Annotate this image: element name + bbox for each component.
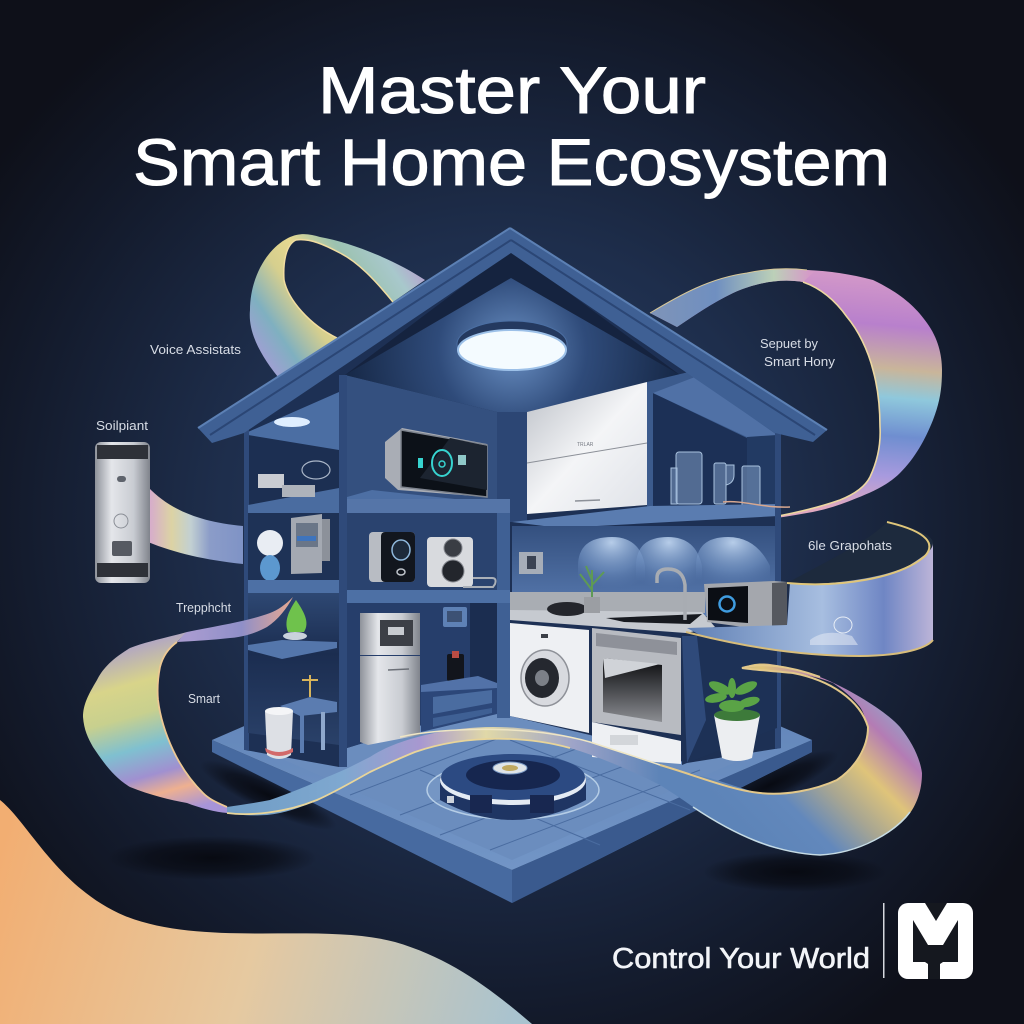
white cup: [265, 707, 293, 759]
house: [198, 228, 827, 903]
tagline: Control Your World: [612, 943, 870, 975]
washing machine: [510, 623, 589, 733]
ribbon: left device band: [148, 487, 243, 564]
slab shadow right: [695, 739, 845, 831]
small devices on shelf: [258, 461, 330, 497]
left first shelf: [248, 488, 339, 513]
potted plant: [704, 678, 761, 761]
wall sensor: [519, 552, 543, 574]
central column wall: [497, 412, 527, 522]
labels: Sepuet by: [760, 336, 818, 351]
center divider: [497, 513, 510, 718]
title: [133, 53, 890, 199]
right upper room back wall: [653, 393, 747, 507]
ceiling spot light: [274, 417, 310, 427]
fridge: [360, 613, 420, 745]
floor slab: [212, 610, 812, 903]
ribbon: top right loop: [650, 269, 942, 523]
white wall cabinet: TRLAR: [577, 442, 594, 448]
second shelves: [248, 580, 510, 603]
drawer cabinet: [421, 676, 497, 732]
table with ornament: [280, 675, 337, 753]
small shelf: [248, 640, 337, 659]
floating shadow left: [107, 836, 317, 880]
labels: Voice Assistats: [150, 342, 242, 357]
middle first shelf: [347, 490, 510, 513]
right upper column: [747, 435, 775, 507]
white wall cabinet: [527, 382, 647, 514]
labels: Trepphcht: [176, 600, 231, 615]
logo divider: [883, 903, 884, 978]
kitchen wall: [512, 526, 777, 616]
smart figure: [257, 530, 283, 581]
thin ribbon strand over shelf: [723, 502, 790, 507]
left and divider walls: [244, 375, 781, 767]
left third room: [248, 593, 339, 745]
labels: Smart: [188, 691, 220, 706]
peach wave corner: [0, 800, 532, 1024]
roof: [198, 228, 827, 443]
oven: [592, 628, 681, 764]
labels: Soilpiant: [96, 418, 148, 433]
glasses: [671, 452, 760, 507]
sink: [606, 614, 702, 624]
black speaker: [447, 651, 464, 681]
attic dark upper band: [345, 250, 680, 375]
left second room: [248, 513, 339, 581]
ribbon: top left loop: [250, 234, 425, 377]
door camera: [369, 532, 415, 582]
floating shadow right: [703, 852, 887, 892]
right upper room: [647, 370, 780, 510]
middle second room: [347, 513, 510, 590]
labels: 6le Grapohats: [808, 538, 893, 553]
labels: [96, 336, 893, 706]
faucet: [657, 569, 685, 620]
slab shadow left: [193, 749, 343, 841]
title: Master Your: [318, 53, 706, 127]
ribbon: right middle band: [686, 522, 933, 656]
speaker camera: [427, 537, 496, 587]
countertop and backsplash: [510, 592, 715, 633]
device: smart cylinder: [95, 442, 150, 583]
house back walls: [245, 240, 781, 767]
title: Smart Home Ecosystem: [133, 125, 890, 199]
microwave: [704, 581, 787, 631]
attic ceiling: [345, 278, 680, 412]
small wall panel: [443, 607, 467, 627]
ribbon: bottom wave: [227, 727, 660, 815]
green decor plant: [283, 600, 307, 640]
thermostat display: [385, 428, 487, 497]
lower right room: [682, 636, 777, 765]
side room shade: [470, 603, 497, 710]
left upper room ceiling glow: [248, 392, 339, 450]
robot vacuum: [427, 754, 599, 820]
under cabinet lights: [578, 537, 770, 592]
left upper room: [248, 415, 339, 507]
upper right shelf: [512, 504, 778, 528]
lit ceiling right upper room: [653, 377, 777, 437]
ribbon: lower left loop: [83, 597, 293, 813]
ceiling lamp: [457, 321, 567, 370]
logo mark: [898, 903, 973, 979]
potted herb: [580, 566, 604, 613]
ribbon: lower right loop: [660, 663, 922, 855]
middle upper room wall: [345, 375, 497, 500]
black kitchen item: [547, 602, 587, 616]
labels: Smart Hony: [764, 354, 836, 369]
wall tablet: [291, 514, 330, 574]
lower right wall shade: [682, 636, 706, 763]
middle third room: [347, 603, 497, 748]
